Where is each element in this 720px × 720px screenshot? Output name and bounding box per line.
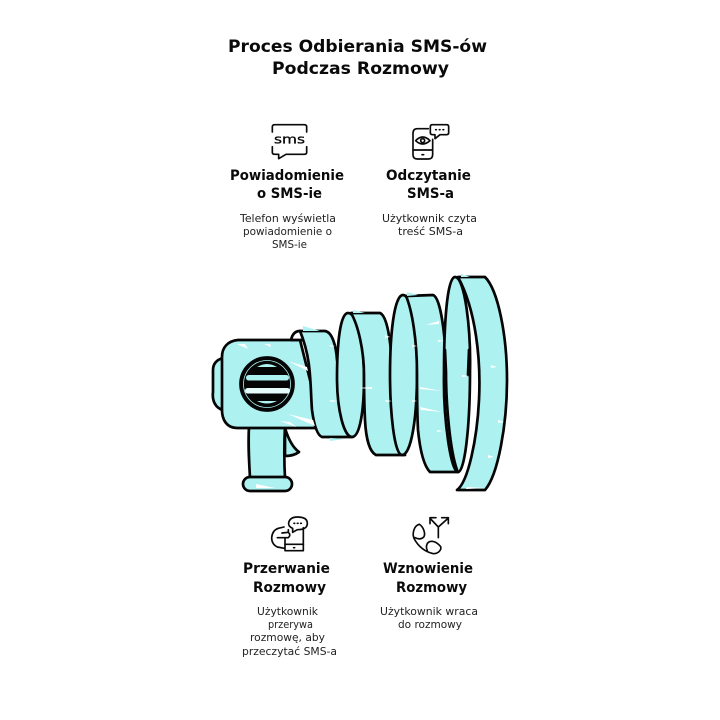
description: Użytkownik wraca xyxy=(380,606,478,618)
heading xyxy=(243,561,330,596)
description: do rozmowy xyxy=(398,619,462,631)
description: Telefon wyświetla xyxy=(239,213,336,225)
description xyxy=(380,606,478,631)
handle xyxy=(249,426,285,478)
title: Podczas Rozmowy xyxy=(272,59,449,78)
description: rozmowę, aby xyxy=(250,632,325,644)
handle base xyxy=(243,477,292,491)
body xyxy=(222,340,322,428)
description xyxy=(242,606,337,658)
heading: Odczytanie xyxy=(386,168,471,184)
icon: phone with eye and chat bubble xyxy=(413,125,449,159)
icon: SMS speech bubble: sms xyxy=(274,132,305,146)
heading: Rozmowy xyxy=(253,580,326,596)
panel: wznowienie rozmowy xyxy=(380,518,478,631)
description: SMS-ie xyxy=(272,239,307,251)
description: powiadomienie o xyxy=(243,226,332,238)
description: treść SMS-a xyxy=(398,226,463,238)
description: przeczytać SMS-a xyxy=(242,646,337,658)
heading xyxy=(386,168,471,202)
trigger xyxy=(285,428,299,456)
heading: Rozmowy xyxy=(396,580,467,596)
speaker grille xyxy=(240,358,294,410)
description: Użytkownik xyxy=(257,606,319,618)
heading: Wznowienie xyxy=(383,561,473,577)
heading: Powiadomienie xyxy=(230,168,344,184)
title: Proces Odbierania SMS-ów xyxy=(228,37,487,56)
heading: Przerwanie xyxy=(243,561,330,577)
icon: phone handset with diverging arrows xyxy=(413,518,448,554)
title xyxy=(228,37,487,78)
description xyxy=(239,213,336,251)
panel: odczytanie SMS-a xyxy=(382,125,477,238)
panel: przerwanie rozmowy xyxy=(242,517,337,658)
paint streaks xyxy=(237,274,504,489)
description: Użytkownik czyta xyxy=(382,213,477,225)
panel: powiadomienie o SMS-ie xyxy=(230,125,344,251)
icon: hand holding phone with chat bubble xyxy=(272,517,307,551)
description: przerywa xyxy=(268,619,313,631)
heading: o SMS-ie xyxy=(257,186,322,202)
illustration: megaphone xyxy=(213,274,507,491)
heading: SMS-a xyxy=(407,186,454,202)
heading xyxy=(383,561,473,596)
description xyxy=(382,213,477,238)
back nub xyxy=(213,358,223,410)
heading xyxy=(230,168,344,202)
horn bands and rings xyxy=(291,277,507,490)
